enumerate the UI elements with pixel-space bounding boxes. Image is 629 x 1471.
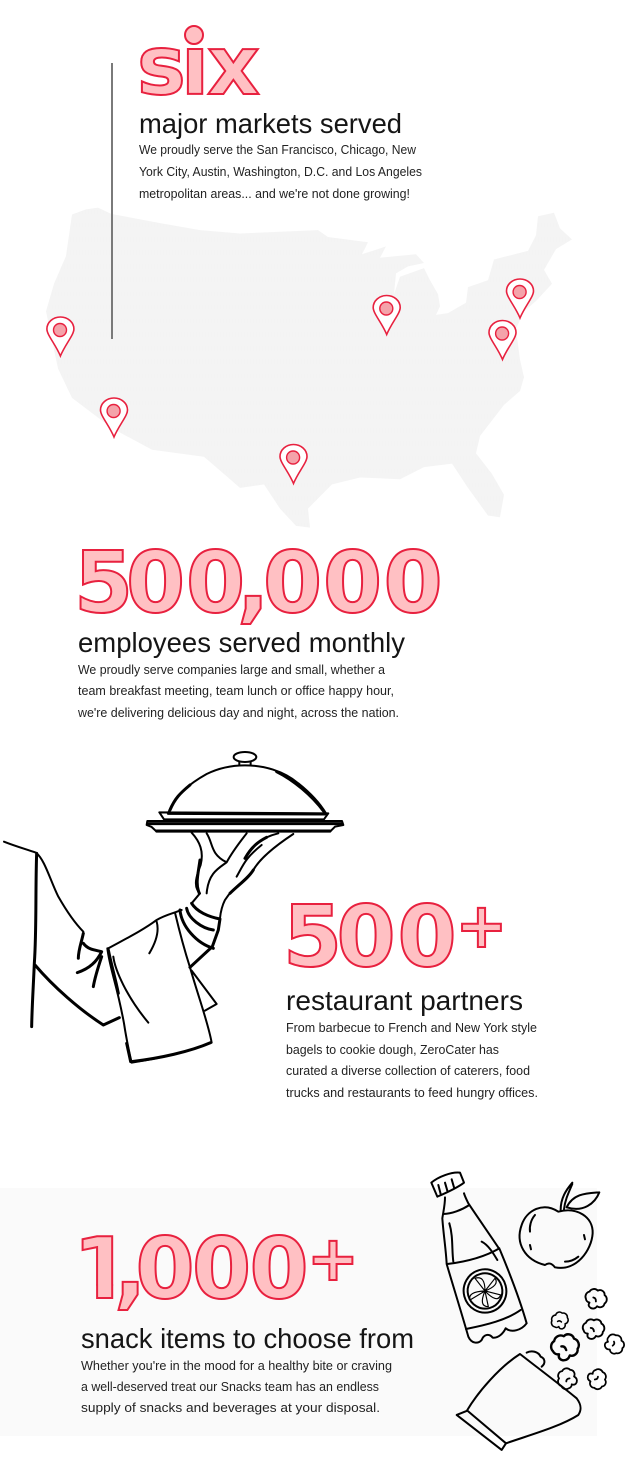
- heading: restaurant partners: restaurant partners: [286, 985, 523, 1016]
- text: employees description: we're delivering delicious day and night, across the nation.: [77, 706, 399, 720]
- text: snacks description: [81, 1359, 392, 1415]
- text: employees description: team breakfast meeting, team lunch or office happy hour,: [78, 684, 394, 698]
- heading: employees served monthly: employees served monthly: [78, 627, 405, 658]
- text: restaurant description: bagels to cookie dough, ZeroCater has: [286, 1043, 499, 1057]
- cloche knob: [234, 752, 256, 765]
- heading: snack items to choose from: snack items to choose from: [81, 1323, 414, 1354]
- icon: snack bag: [457, 1354, 581, 1450]
- text: markets description: York City, Austin, Washington, D.C. and Los Angeles: [139, 165, 422, 179]
- text: snacks description: Whether you're in the mood for a healthy bite or craving: [81, 1359, 392, 1373]
- napkin: [107, 913, 217, 1063]
- pin: New York: [506, 279, 534, 318]
- text: snacks description: supply of snacks and beverages at your disposal.: [81, 1401, 380, 1415]
- stat: 1,000+: +: [307, 1222, 359, 1295]
- text: restaurant description: From barbecue to French and New York style: [286, 1021, 537, 1035]
- pin: Los Angeles: [100, 398, 128, 437]
- US dot map: [46, 208, 572, 528]
- pin: Chicago: [373, 296, 400, 334]
- map pins: [47, 279, 534, 484]
- text: restaurant description: [286, 1021, 538, 1100]
- heading: major markets served: major markets served: [139, 108, 402, 139]
- cloche dome: [168, 765, 326, 813]
- plate rim: [159, 812, 328, 819]
- hand: [192, 833, 293, 918]
- vertical rule: [111, 63, 113, 339]
- stat: 1,000+: [82, 1234, 354, 1311]
- text: employees description: [77, 663, 399, 720]
- icon: orange slice label: [459, 1265, 511, 1317]
- tray: [147, 821, 343, 832]
- stat: 1,000+: 1: [73, 1220, 132, 1319]
- icon: apple: [520, 1183, 599, 1268]
- pin: San Francisco: [47, 317, 74, 356]
- text: markets description: [139, 143, 422, 201]
- pin: Austin: [280, 444, 307, 484]
- pin: Washington DC: [489, 320, 516, 360]
- illustration: snacks: [431, 1173, 626, 1450]
- stat: 500+: +: [456, 889, 507, 962]
- text: employees description: We proudly serve companies large and small, whether a: [78, 663, 385, 677]
- text: restaurant description: trucks and restaurants to feed hungry offices.: [286, 1086, 538, 1100]
- text: restaurant description: curated a diverse collection of caterers, food: [286, 1064, 530, 1078]
- icon: popcorn: [527, 1286, 626, 1391]
- text: markets description: metropolitan areas... and we're not done growing!: [139, 187, 410, 201]
- cuff: [180, 903, 220, 967]
- stat: 500+: 500: [283, 888, 457, 987]
- illustration: waiter arm holding cloche: [4, 752, 343, 1063]
- stat: six: six: [137, 19, 260, 114]
- text: markets description: We proudly serve the San Francisco, Chicago, New: [139, 143, 417, 157]
- sleeve and body: [4, 842, 182, 1027]
- panel: snacks background: [0, 1188, 597, 1436]
- stat: 500,000: 500,000: [74, 534, 443, 633]
- text: snacks description: a well-deserved treat our Snacks team has an endless: [81, 1380, 379, 1394]
- icon: bottle: [431, 1173, 527, 1343]
- stat: 1,000+: ,000: [114, 1220, 309, 1319]
